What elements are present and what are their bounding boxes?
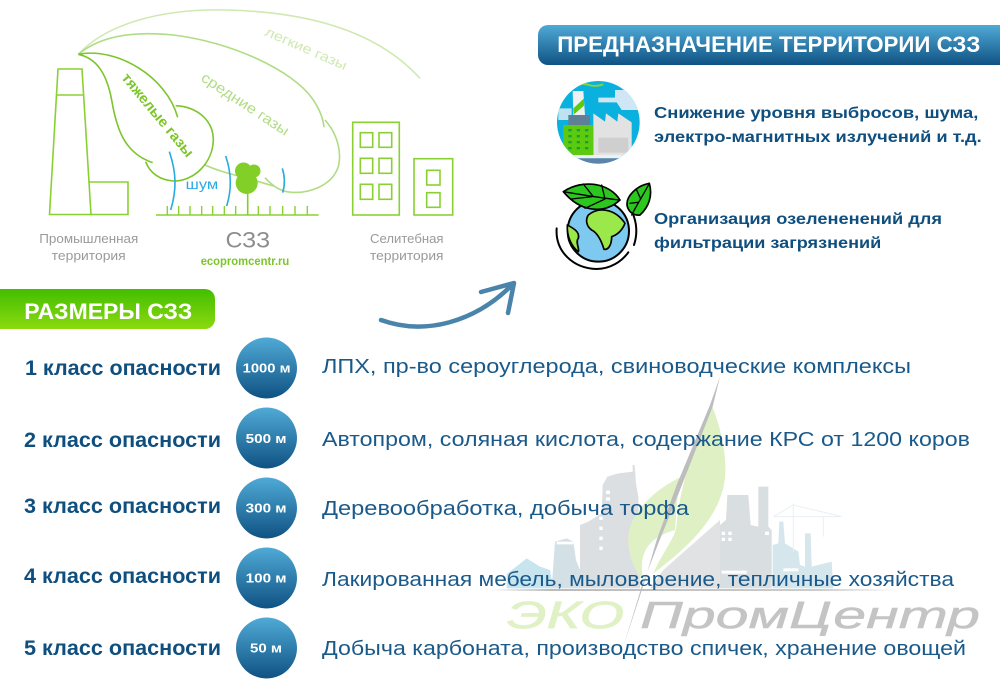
light gases curve bbox=[78, 10, 420, 78]
watermark city skyline bbox=[507, 465, 842, 588]
label: website: ecopromcentr.ru bbox=[201, 256, 289, 268]
row: class 1: 1 класс опасности bbox=[25, 357, 221, 380]
row: class 3 bbox=[24, 478, 690, 538]
label: medium gases: средние газы bbox=[198, 70, 292, 139]
panel: zone sizes bbox=[0, 289, 970, 678]
text: emission reduction: Снижение уровня выбросов, шума, bbox=[654, 105, 978, 122]
row: class 3: Деревообработка, добыча торфа bbox=[322, 498, 690, 520]
heavy gases curve bbox=[78, 53, 213, 181]
label: residential territory: Селитебная bbox=[370, 232, 444, 246]
text: greening: фильтрации загрязнений bbox=[654, 235, 881, 252]
row: class 5: 50 м bbox=[250, 642, 282, 656]
row: class 3: 300 м bbox=[246, 502, 287, 516]
panel: purpose of the zone bbox=[538, 25, 1000, 269]
diagram: gas dispersion across the zone bbox=[39, 10, 453, 268]
text: emission reduction: электро-магнитных излучений и т.д. bbox=[654, 129, 982, 146]
row: class 4: Лакированная мебель, мыловарение, тепличные хозяйства bbox=[322, 569, 955, 591]
watermark: ЭкоПромЦентр logo bbox=[490, 377, 980, 647]
label: industrial territory: Промышленная bbox=[39, 232, 138, 246]
row: class 1 bbox=[25, 338, 911, 398]
arrow: from diagram to purpose bbox=[381, 283, 514, 327]
heading bar: sizes: РАЗМЕРЫ СЗЗ bbox=[24, 299, 192, 324]
ground with ticks bbox=[156, 206, 319, 215]
row: class 5: 5 класс опасности bbox=[24, 637, 221, 660]
label: light gases: легкие газы bbox=[263, 24, 349, 73]
label: noise: шум bbox=[186, 176, 218, 192]
row: class 2 bbox=[24, 408, 970, 468]
row: class 3: 3 класс опасности bbox=[24, 495, 221, 518]
row: class 5: Добыча карбоната, производство спичек, хранение овощей bbox=[322, 638, 966, 660]
heading bar: sizes bbox=[0, 289, 215, 329]
label: СЗЗ: СЗЗ bbox=[226, 228, 270, 252]
watermark diagonal blade bbox=[623, 377, 720, 647]
medium gases curve bbox=[78, 34, 340, 192]
row: class 1: 1000 м bbox=[243, 362, 291, 376]
row: class 1: ЛПХ, пр-во сероуглерода, свиноводческие комплексы bbox=[322, 356, 911, 378]
heading bar: purpose bbox=[538, 25, 1000, 65]
label: residential territory: территория bbox=[370, 249, 444, 263]
row: class 2: 500 м bbox=[246, 432, 287, 446]
row: class 2: 2 класс опасности bbox=[24, 429, 221, 452]
tree bbox=[235, 162, 260, 215]
icon: globe with leaves bbox=[557, 183, 651, 269]
label: heavy gases: тяжелые газы bbox=[118, 70, 196, 161]
industrial chimney bbox=[50, 69, 128, 214]
row: class 4 bbox=[24, 548, 955, 608]
watermark leaf bbox=[628, 405, 725, 580]
watermark wordmark ПромЦентр: ПромЦентр bbox=[640, 595, 980, 637]
noise arcs bbox=[169, 152, 284, 210]
watermark wordmark ЭКО: ЭКО bbox=[507, 595, 624, 637]
icon: factory bbox=[557, 81, 640, 165]
row: class 4: 4 класс опасности bbox=[24, 565, 221, 588]
text: greening: Организация озелененений для bbox=[654, 211, 942, 228]
row: class 4: 100 м bbox=[246, 572, 287, 586]
label: industrial territory: территория bbox=[52, 249, 126, 263]
residential buildings bbox=[353, 122, 453, 215]
row: class 5 bbox=[24, 618, 966, 678]
heading bar: purpose: ПРЕДНАЗНАЧЕНИЕ ТЕРРИТОРИИ СЗЗ bbox=[557, 32, 980, 57]
row: class 2: Автопром, соляная кислота, содержание КРС от 1200 коров bbox=[322, 429, 970, 451]
watermark baseline bbox=[490, 589, 900, 591]
